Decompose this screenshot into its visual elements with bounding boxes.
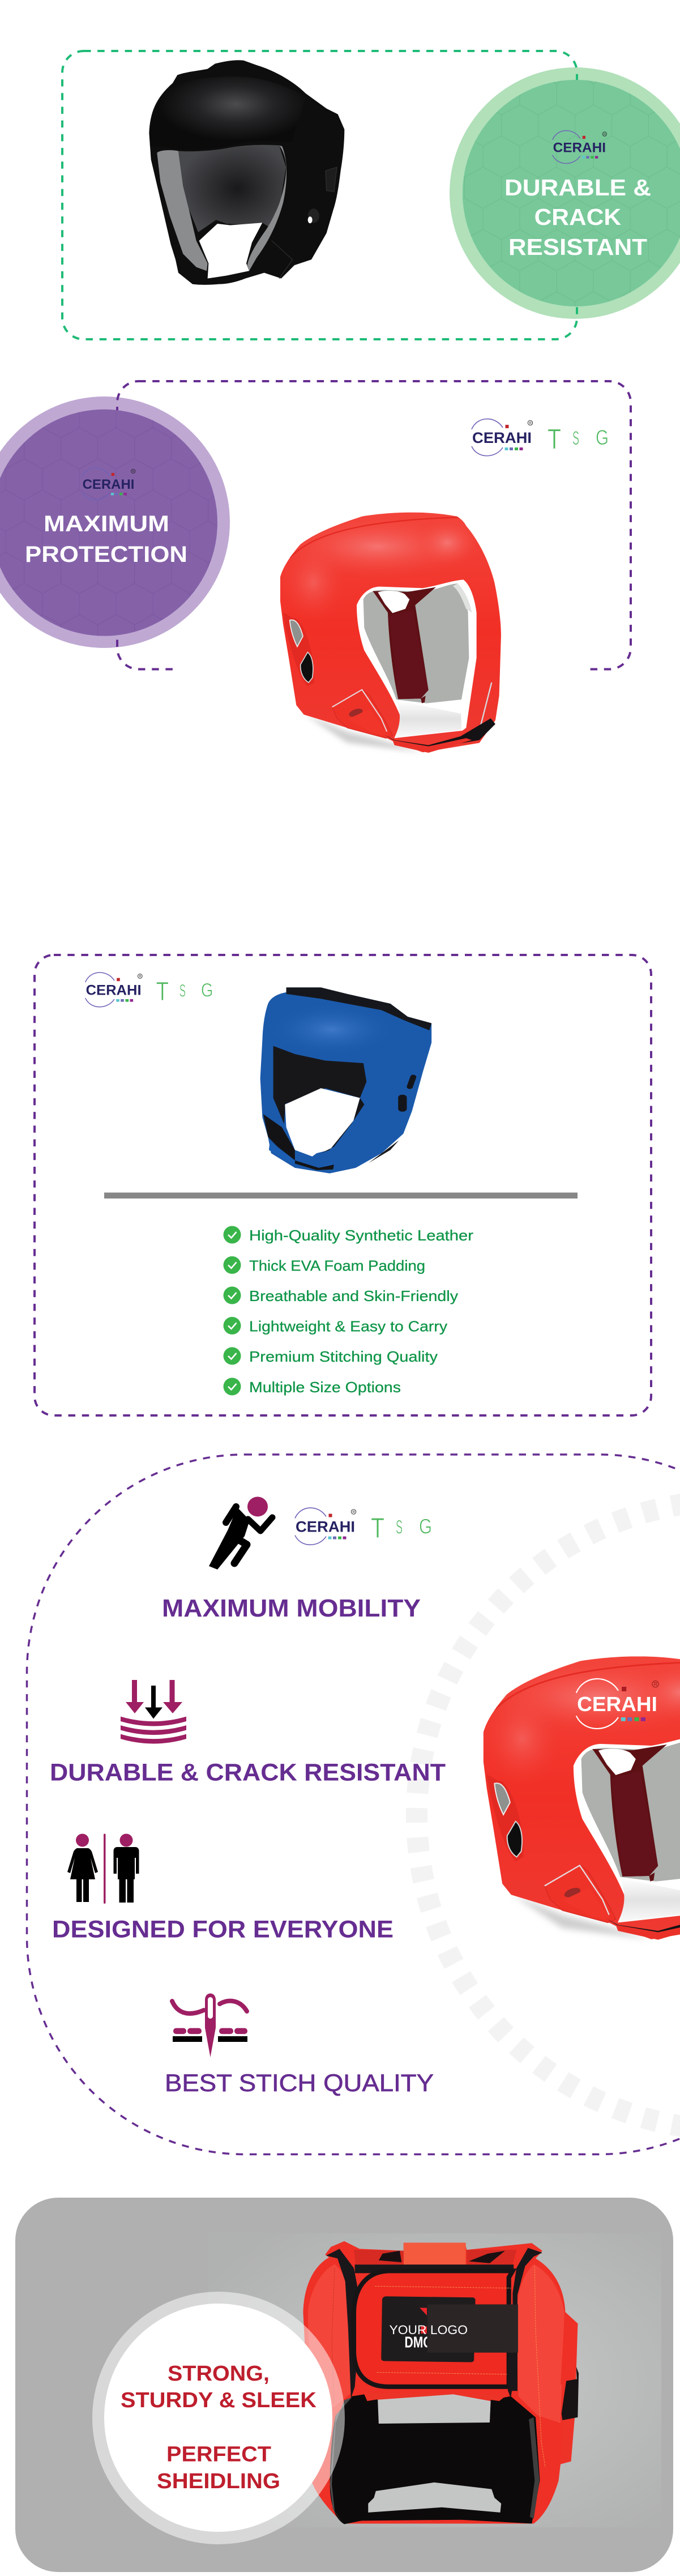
logo: CERAHI TSG xyxy=(85,973,213,1007)
logo: CERAHI TSG: T xyxy=(371,1512,384,1544)
logo: CERAHI TSG: CERAHI xyxy=(296,1519,355,1536)
feature list xyxy=(223,1226,473,1396)
photo backdrop xyxy=(208,2233,661,2527)
dashed panel: purple xyxy=(35,955,651,1415)
logo: CERAHI on green xyxy=(553,131,607,164)
circle inner: white xyxy=(104,2304,332,2532)
circle ring: green xyxy=(450,67,680,319)
circle heading: MAXIMUM xyxy=(44,511,169,536)
dashed panel: large rounded outline xyxy=(27,1455,680,2155)
logo: CERAHI TSG: S xyxy=(396,1517,403,1538)
product photo: red head guard xyxy=(272,507,510,756)
circle text xyxy=(121,2362,317,2493)
logo: CERAHI TSG: R xyxy=(139,975,142,979)
section 4: feature icons with red guard xyxy=(27,1455,680,2155)
logo: white CERAHI on helmet xyxy=(576,1679,658,1729)
logo: CERAHI TSG: CERAHI xyxy=(86,983,142,999)
logo: CERAHI on purple: R xyxy=(132,470,135,474)
heading: durable and crack resistant: DURABLE & CRACK RESISTANT xyxy=(50,1759,446,1786)
heading: designed for everyone: DESIGNED FOR EVERYONE xyxy=(52,1916,394,1943)
logo: CERAHI TSG: G xyxy=(419,1515,432,1538)
logo: CERAHI TSG xyxy=(472,419,609,456)
logo: CERAHI TSG: S xyxy=(572,428,579,449)
product photo: red guard rear view xyxy=(303,2241,579,2524)
logo: CERAHI TSG: R xyxy=(529,421,532,425)
logo: CERAHI TSG xyxy=(295,1508,432,1545)
panel: grey background xyxy=(15,2198,673,2572)
dashed ring behind helmet xyxy=(417,1500,680,2130)
product photo: red head guard large xyxy=(473,1650,680,1944)
product photo: blue head guard xyxy=(260,987,431,1174)
icon: pressure arrows on layers xyxy=(121,1680,186,1743)
circle heading xyxy=(25,511,187,567)
circle heading: PROTECTION xyxy=(25,542,187,567)
section 2: maximum protection xyxy=(0,381,631,756)
circle heading: CRACK xyxy=(534,204,622,230)
logo: CERAHI on green: R xyxy=(604,133,606,137)
logo: CERAHI TSG: CERAHI xyxy=(472,429,532,446)
feature: lightweight and easy to carry: Lightweight & Easy to Carry xyxy=(249,1317,447,1334)
logo: white CERAHI on helmet: CERAHI xyxy=(577,1692,657,1716)
logo: CERAHI TSG: G xyxy=(201,979,213,1001)
circle text: PERFECT xyxy=(166,2442,271,2466)
logo: CERAHI on purple xyxy=(82,468,135,500)
circle heading: DURABLE & xyxy=(504,174,651,201)
circle text: STURDY & SLEEK xyxy=(121,2389,317,2412)
circle heading: RESISTANT xyxy=(508,234,647,260)
circle heading xyxy=(504,174,651,260)
logo: CERAHI TSG: R xyxy=(352,1511,355,1515)
circle inner: green with hex pattern xyxy=(463,80,680,306)
section 3: blue guard and feature list xyxy=(35,955,651,1415)
feature: breathable and skin-friendly: Breathable and Skin-Friendly xyxy=(249,1287,458,1304)
circle inner: purple with hex pattern xyxy=(0,410,217,636)
feature: premium stitching quality: Premium Stitching Quality xyxy=(249,1348,438,1365)
dashed panel: purple xyxy=(117,381,631,669)
logo: white CERAHI on helmet: R xyxy=(654,1682,657,1687)
logo: CERAHI on purple: CERAHI xyxy=(83,477,134,492)
heading: best stich quality: BEST STICH QUALITY xyxy=(165,2070,434,2097)
divider bar xyxy=(104,1193,578,1199)
circle text: STRONG, xyxy=(168,2362,270,2386)
icon: woman and man xyxy=(67,1834,139,1904)
circle ring: translucent white xyxy=(92,2292,345,2544)
product photo: black head guard xyxy=(149,60,344,285)
feature: thick eva foam padding: Thick EVA Foam Padding xyxy=(249,1257,425,1274)
circle ring: purple xyxy=(0,396,230,648)
logo: CERAHI TSG: G xyxy=(596,426,609,449)
feature: high-quality synthetic leather: High-Quality Synthetic Leather xyxy=(249,1227,473,1244)
icon: runner xyxy=(209,1496,272,1570)
icon: needle and stitches xyxy=(172,1994,247,2057)
logo: CERAHI TSG: T xyxy=(156,976,169,1006)
circle text: SHEIDLING xyxy=(157,2470,280,2493)
gap in the panel's lower edge xyxy=(173,663,588,674)
feature: multiple size options: Multiple Size Options xyxy=(249,1379,401,1396)
logo: CERAHI TSG: S xyxy=(179,980,186,1000)
label text on helmet patch: DMC xyxy=(404,2334,431,2351)
logo: CERAHI on green: CERAHI xyxy=(553,140,606,155)
dashed panel: green xyxy=(62,51,577,339)
label text on helmet patch: YOUR LOGO xyxy=(390,2323,468,2337)
label text on helmet patch xyxy=(390,2326,467,2348)
section 1: durable and crack resistant xyxy=(62,51,680,339)
logo: CERAHI TSG: T xyxy=(548,423,561,455)
section 5: strong, sturdy and sleek xyxy=(15,2198,673,2572)
heading: maximum mobility: MAXIMUM MOBILITY xyxy=(162,1594,421,1622)
